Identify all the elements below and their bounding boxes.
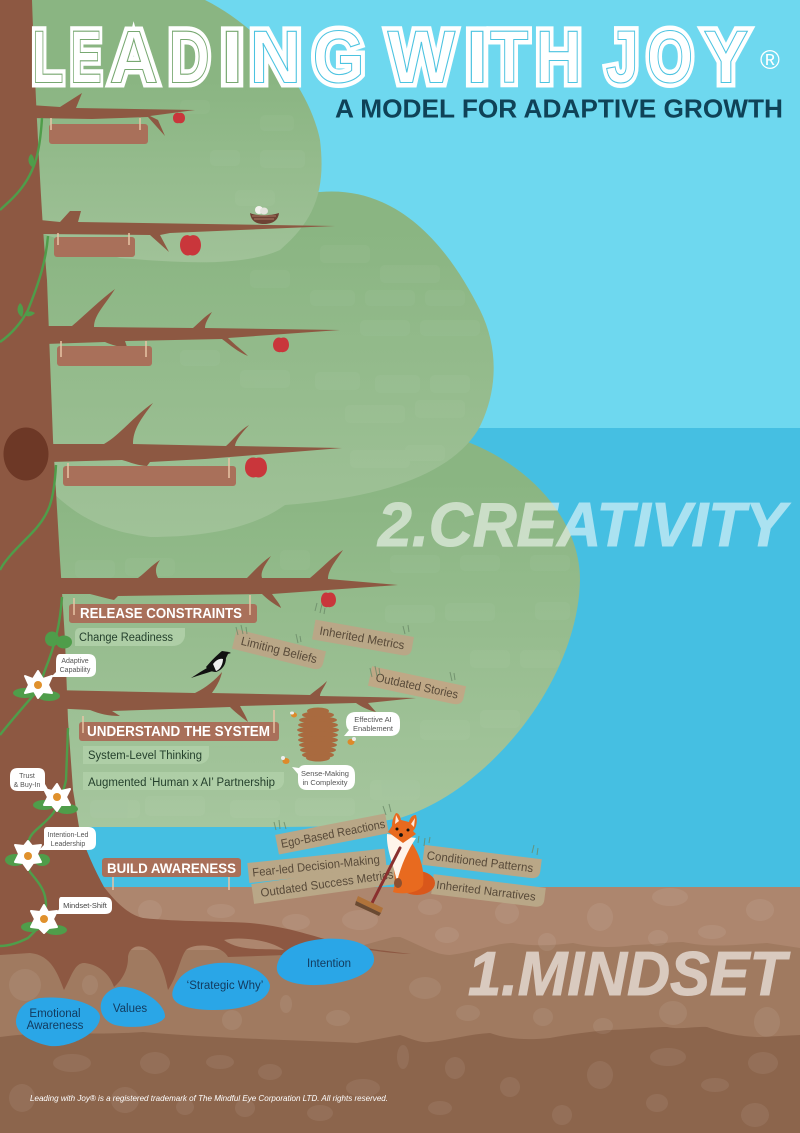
tan label: limiting beliefs: Limiting Beliefs [239,634,319,666]
sky [0,0,800,430]
nest with eggs [250,206,279,224]
fox with broom [355,813,435,916]
fox head [388,813,417,843]
bee 1 [290,712,297,718]
label: change readiness [75,628,185,646]
bubble: mindset-shift [56,897,112,914]
title: E [70,17,102,99]
vine leaves [18,154,72,648]
registered mark: ® [760,45,780,75]
bubble: adaptive capability [51,654,96,677]
empty sign 1 [49,118,148,144]
blue root node: intention [277,939,374,985]
soil: stones [9,888,780,1127]
flower 2 [33,784,78,814]
tan label: outdated stories: Outdated Stories [374,670,460,702]
tan label: inherited narratives [431,874,546,908]
soil patch over root [224,938,284,950]
bubble: adaptive capability: Capability [60,667,91,674]
bubble: effective ai enablement: Enablement [353,724,394,733]
branch 2 [40,211,335,252]
bubble: intention-led leadership: Leadership [51,841,85,848]
blue root node: strategic why [172,963,270,1010]
branch 5 [50,550,398,608]
blue root node: emotional awareness [16,997,100,1046]
sign: understand the system [79,710,279,741]
branch 6 [50,672,416,722]
tree trunk and roots [0,0,411,990]
flower 1 [13,671,60,701]
title: O [647,16,693,99]
bubble: intention-led leadership [39,827,96,850]
fox chest [387,834,416,882]
title: Y [704,16,748,98]
tan label: inherited metrics [312,620,414,657]
bubble: trust and buy-in: & Buy-In [14,782,41,789]
title: N [250,16,301,99]
tan label: outdated success metrics: Outdated Success Metrics [260,867,394,900]
title: E [70,17,102,99]
blue root node: values [101,987,165,1027]
foliage: top crown [30,0,322,262]
tree [0,0,416,990]
apple 2 [180,235,201,255]
title: L [32,15,64,99]
apple 3 [273,337,289,352]
foliage [30,0,580,827]
heading: 1.mindset: 1.MINDSET [468,940,791,1009]
flower 3 [5,841,50,870]
heading: 2.creativity: 2.CREATIVITY [377,491,792,560]
title: T [490,16,528,99]
tan label: conditioned patterns: Conditioned Patterns [426,848,534,875]
bubble: intention-led leadership: Intention-Led [48,832,89,839]
soil: middle layer [0,937,800,1060]
title: A [110,16,158,98]
bubble: sense-making: Sense-Making [301,769,349,778]
title: Y [704,16,748,98]
label: change readiness: Change Readiness [79,632,173,644]
bubble: trust and buy-in: Trust [19,773,35,780]
fox tail [399,871,435,895]
bubble: mindset-shift: Mindset-Shift [63,901,108,910]
motion marks [236,603,538,855]
empty sign 2 [54,233,135,257]
beehive [297,708,339,762]
title: A [110,16,158,98]
apple 5 [321,592,336,607]
sign: build awareness [102,858,241,890]
empty sign 3 [57,341,152,366]
foliage: lower crown [30,430,580,827]
label: system-level thinking [83,746,209,764]
bubble: sense-making [292,765,355,790]
bubble: effective ai enablement: Effective AI [354,715,392,724]
sign: release constraints [69,595,257,623]
empty sign 4 [63,458,236,486]
soil: top layer [0,887,800,987]
title: G [313,15,365,98]
sign: understand the system: UNDERSTAND THE SYSTEM [87,724,270,740]
title: I [221,16,243,99]
sign: release constraints: RELEASE CONSTRAINTS [80,606,242,622]
broom [372,848,400,903]
bee 2 [348,737,356,745]
bubble: sense-making: in Complexity [302,778,348,787]
blue root node: strategic why: ‘Strategic Why’ [187,980,263,992]
label: augmented partnership: Augmented ‘Human x AI’ Partnership [88,777,275,789]
subtitle: A MODEL FOR ADAPTIVE GROWTH [335,94,783,124]
flower 4 [21,905,67,935]
footer trademark: Leading with Joy® is a registered trademark of The Mindful Eye Corporation LTD. All rights reserved. [30,1094,388,1103]
label: augmented partnership [83,772,284,790]
title: D [169,15,210,98]
apple 1 [173,113,185,123]
vine [0,118,68,946]
title: J [606,16,639,99]
tree hollow [4,428,48,480]
title: W [388,17,455,99]
tan label: fear-led decision-making: Fear-led Decision-Making [252,852,380,880]
branch 1 [30,93,195,136]
title: G [313,15,365,98]
foliage: middle crown [30,191,494,537]
bubble: effective ai enablement [344,712,400,736]
bubble: adaptive capability: Adaptive [61,658,89,665]
tan label: inherited metrics: Inherited Metrics [318,624,406,652]
title: N [250,16,301,99]
bubble: trust and buy-in [10,768,49,791]
blue root node: values: Values [113,1003,147,1015]
bee 3 [281,756,290,764]
tan label: ego-based reactions: Ego-Based Reactions [280,817,386,851]
bird: magpie [191,651,231,678]
blue root node: emotional awareness: Awareness [27,1020,84,1032]
title: I [221,16,243,99]
title: I [466,16,488,99]
title: I [466,16,488,99]
sign: build awareness: BUILD AWARENESS [107,860,236,876]
foliage: leaf texture [75,100,570,818]
fox body [392,843,423,893]
branch 4 [50,403,342,466]
blue root node: emotional awareness: Emotional [29,1008,81,1020]
branch 3 [45,289,340,356]
tan label: limiting beliefs [232,629,326,671]
title: L [32,15,64,99]
title: D [169,15,210,98]
title: O [647,16,693,99]
sea [0,428,800,898]
title: J [606,16,639,99]
apple 4 [245,457,267,477]
label: system-level thinking: System-Level Thinking [88,750,202,762]
blue root node: intention: Intention [307,958,351,970]
title: H [536,16,581,99]
tan label: inherited narratives: Inherited Narratives [436,880,536,904]
title: W [388,17,455,99]
title [32,15,748,99]
soil: bottom layer [0,1027,800,1133]
soil layers [0,887,800,1133]
title: T [490,16,528,99]
title: H [536,16,581,99]
